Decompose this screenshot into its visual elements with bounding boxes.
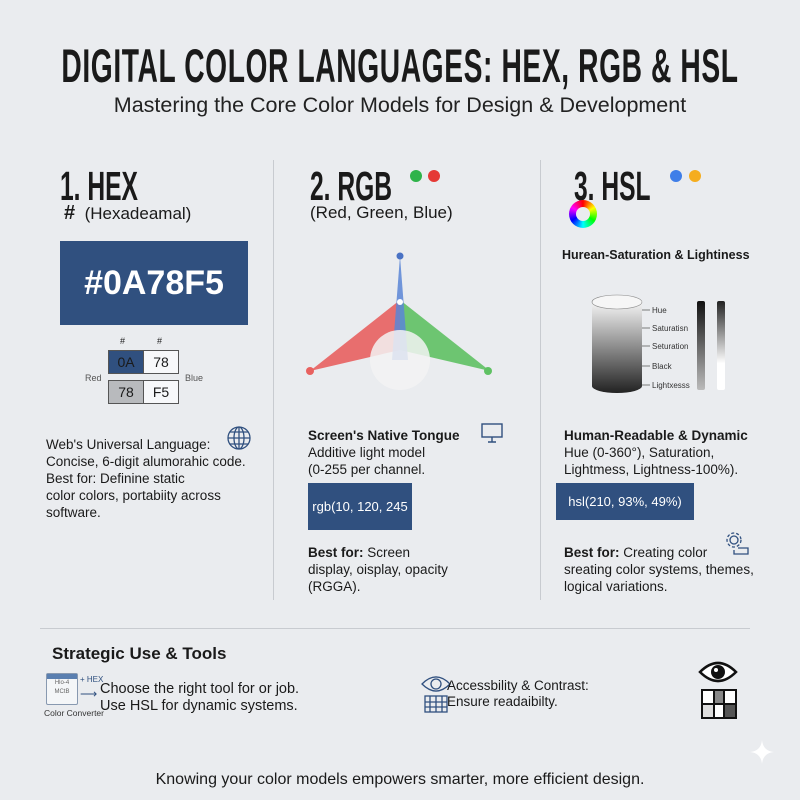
text: RGB description: Additive light model [308,445,425,460]
rgb code box [308,483,412,530]
text: HSL description: Human-Readable & Dynamic [564,428,748,443]
icon: dots [670,170,701,182]
chart: HSL cylinder: Hue [652,306,667,315]
icon: monitor [481,423,503,443]
subheading: (Red, Green, Blue) [310,203,453,222]
heading: 1. HEX: 1. HEX [60,163,138,209]
text: HSL best for: Best for: Creating color [564,545,707,560]
hex breakdown grid: Red [85,373,102,383]
text: RGB best for: (RGGA). [308,579,360,594]
subtitle: Mastering the Core Color Models for Design & Development [114,93,686,117]
text: choose tool: Use HSL for dynamic systems. [100,698,298,714]
text: HEX description [46,437,246,520]
hex breakdown grid: 0A [117,354,135,370]
hsl code box: hsl(210, 93%, 49%) [568,494,682,509]
icon: color converter: Hlo-4 [55,680,69,686]
text: HSL best for: sreating color systems, themes, [564,562,754,577]
chart: HSL cylinder: Black [652,362,673,371]
text: HSL best for: logical variations. [564,579,668,594]
hex breakdown grid: # [120,336,125,346]
hex breakdown grid: Blue [185,373,203,383]
text: RGB description: Screen's Native Tongue [308,428,460,443]
text: RGB best for [308,545,448,594]
chart: RGB light diagram [306,252,492,375]
icon: sparkle [752,742,772,762]
text: HSL description [564,428,748,477]
text: RGB description [308,428,460,477]
chart: HSL cylinder: Seturation [652,342,688,351]
icon: color converter: MCtB [54,689,70,695]
panel: strategic use & tools [44,644,738,719]
icon: dots [410,170,440,182]
hex breakdown grid [85,336,203,404]
hex code box: #0A78F5 [84,264,224,302]
hex breakdown grid: # [157,336,162,346]
icon: color converter: ⟶ [80,687,97,701]
text: choose tool: Choose the right tool for or job. [100,681,299,697]
text: HEX description: color colors, portabiity across [46,488,221,503]
heading: 3. HSL: 3. HSL [574,163,651,209]
hex breakdown grid: F5 [153,384,169,400]
text: accessibility: Ensure readaibilty. [447,694,558,709]
hex breakdown grid: 78 [153,354,169,370]
heading: Strategic Use & Tools [52,644,226,663]
icon: eye with grid [421,676,451,713]
text: RGB best for: display, oisplay, opacity [308,562,448,577]
icon: color converter [44,673,104,718]
title: DIGITAL COLOR LANGUAGES: HEX, RGB & HSL [61,39,739,92]
heading: 2. RGB: 2. RGB [310,163,392,209]
text: HSL best for [564,545,754,594]
text: HEX description: Concise, 6-digit alumorahic code. [46,454,246,469]
icon: gear [726,532,749,555]
panel: HSL [556,163,754,594]
hex breakdown grid: 78 [118,384,134,400]
text: HEX description: Web's Universal Language: [46,437,210,452]
hex code box [60,241,248,325]
text: RGB best for: Best for: Screen [308,545,410,560]
icon: big eye and contrast grid [698,662,738,719]
footer tagline: Knowing your color models empowers smarter, more efficient design. [156,771,644,788]
text: choose tool [100,681,299,714]
icon: color wheel [569,200,597,228]
text: HSL description: Lightmess, Lightness-100%). [564,462,738,477]
text: HEX description: Best for: Definine static [46,471,185,486]
hsl code box [556,483,694,520]
chart: HSL cylinder: Saturatisn [652,324,688,333]
icon: color converter: Color Converter [44,708,104,718]
text: RGB description: (0-255 per channel. [308,462,425,477]
panel: HEX [46,163,251,520]
icon: color converter: + HEX [80,675,103,684]
subheading: Hurean-Saturation & Lightiness [562,248,750,262]
text: HEX description: software. [46,505,101,520]
chart: HSL cylinder: Lightxesss [652,381,690,390]
icon: globe [227,426,251,450]
text: accessibility: Accessbility & Contrast: [447,678,589,693]
text: accessibility [447,678,589,709]
chart: HSL cylinder [592,294,725,393]
rgb code box: rgb(10, 120, 245 [312,499,408,514]
panel: RGB [306,163,503,594]
text: HSL description: Hue (0-360°), Saturation, [564,445,714,460]
subheading: # (Hexadeamal) [64,202,191,224]
